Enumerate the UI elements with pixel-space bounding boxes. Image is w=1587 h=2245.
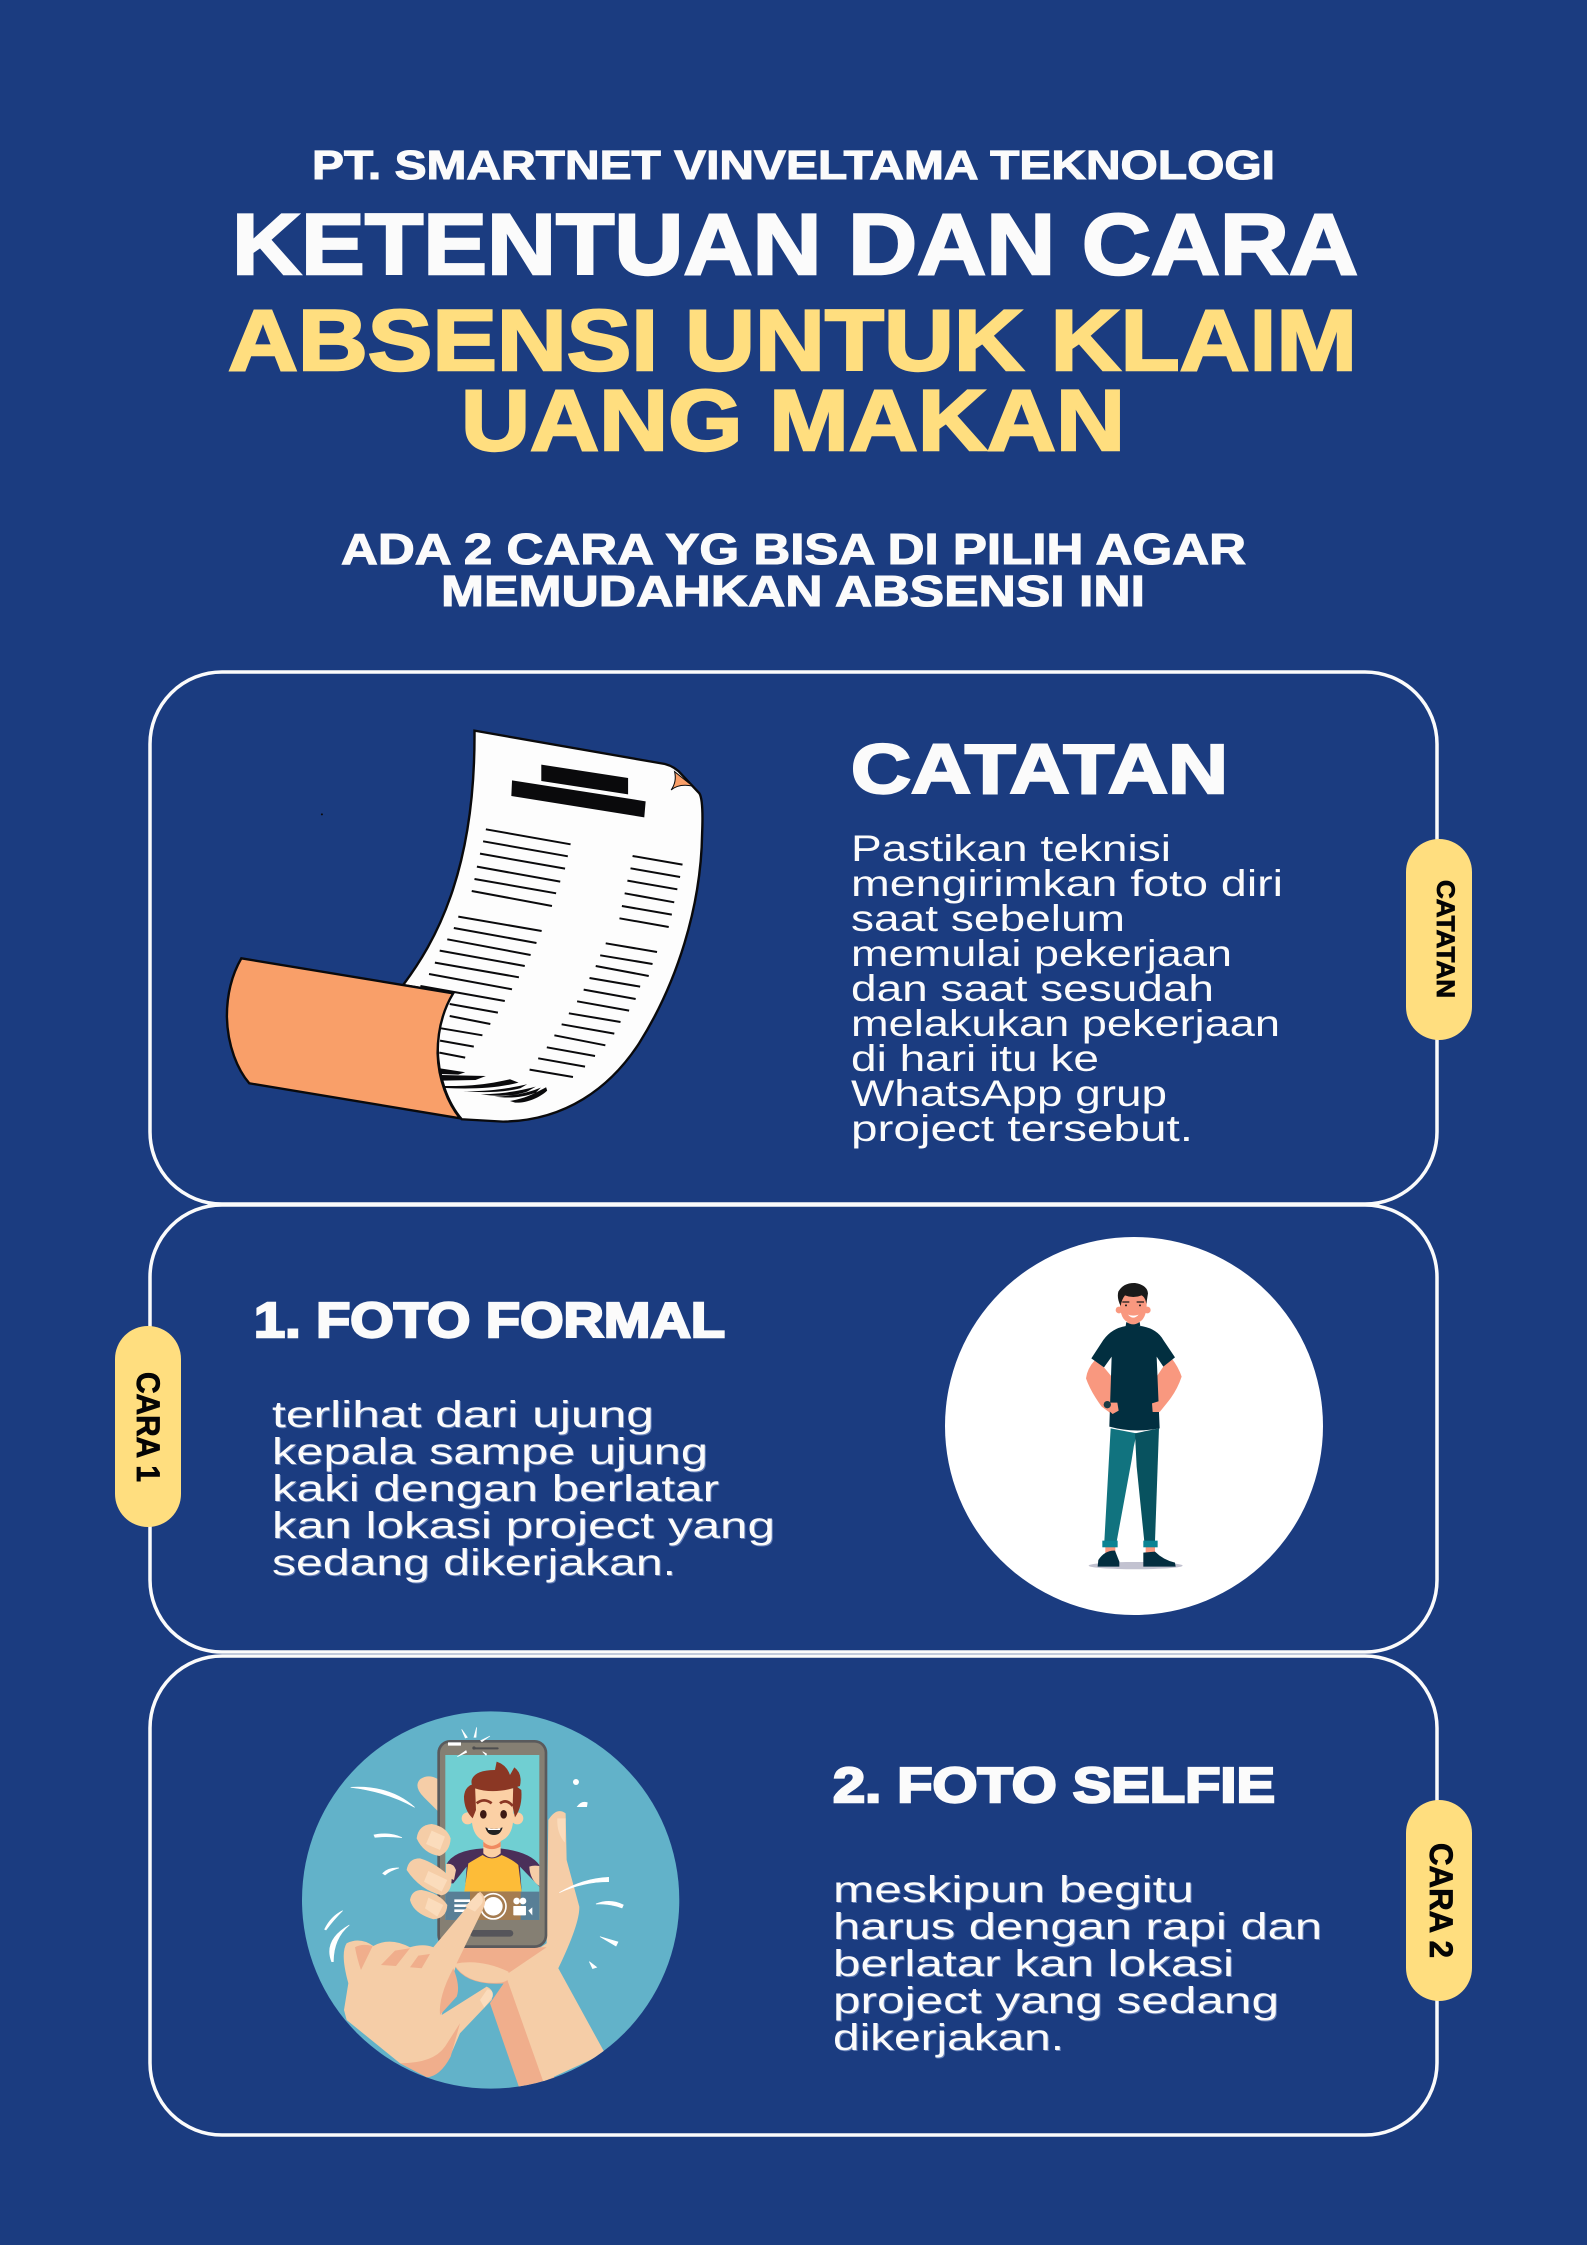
body text: foto formal: kan lokasi project yang [272,1505,775,1546]
panel: cara 2 foto selfie [150,1656,1472,2135]
body text: catatan [851,828,1283,1149]
subtitle [341,525,1246,616]
tab: catatan: CATATAN [1431,880,1459,998]
body text: catatan: project tersebut. [851,1108,1193,1149]
body text: foto formal: sedang dikerjakan. [272,1542,676,1583]
body text: catatan: melakukan pekerjaan [851,1003,1280,1044]
body text: foto selfie: harus dengan rapi dan [833,1906,1322,1947]
body text: foto selfie: meskipun begitu [833,1869,1194,1910]
body text: catatan: Pastikan teknisi [851,828,1171,869]
subtitle: MEMUDAHKAN ABSENSI INI [441,567,1145,616]
body text: foto selfie: dikerjakan. [833,2017,1064,2058]
panel: cara 1 foto formal [115,1205,1437,1652]
body text: catatan: WhatsApp grup [851,1073,1167,1114]
tab: cara 2 [1406,1800,1472,2001]
body text: foto selfie: project yang sedang [833,1980,1279,2021]
illustration: selfie with smartphone [302,1711,679,2090]
body text: catatan: di hari itu ke [851,1038,1099,1079]
heading: foto selfie: 2. FOTO SELFIE [833,1759,1275,1813]
company name: PT. SMARTNET VINVELTAMA TEKNOLOGI [312,142,1275,188]
heading: foto formal: 1. FOTO FORMAL [254,1294,725,1348]
panel: catatan [150,672,1472,1204]
body text: foto formal: kepala sampe ujung [272,1431,708,1472]
title: KETENTUAN DAN CARA [232,197,1358,293]
illustration: paper receipt [227,731,702,1122]
body text: foto selfie [833,1869,1322,2058]
subtitle: ADA 2 CARA YG BISA DI PILIH AGAR [341,525,1246,574]
title: ABSENSI UNTUK KLAIM [228,293,1357,389]
title [228,197,1358,469]
body text: foto formal [272,1394,775,1583]
illustration: standing man in white circle [945,1237,1323,1615]
heading: catatan: CATATAN [851,730,1228,808]
body text: catatan: memulai pekerjaan [851,933,1232,974]
tab: cara 1 [115,1326,181,1527]
body text: foto formal: terlihat dari ujung [272,1394,654,1435]
body text: catatan: dan saat sesudah [851,968,1214,1009]
title: UANG MAKAN [461,373,1125,469]
body text: catatan: mengirimkan foto diri [851,863,1283,904]
body text: foto formal: kaki dengan berlatar [272,1468,719,1509]
body text: catatan: saat sebelum [851,898,1125,939]
body text: foto selfie: berlatar kan lokasi [833,1943,1234,1984]
tab: cara 1: CARA 1 [130,1372,166,1482]
tab: cara 2: CARA 2 [1423,1843,1459,1958]
tab: catatan [1406,839,1472,1040]
